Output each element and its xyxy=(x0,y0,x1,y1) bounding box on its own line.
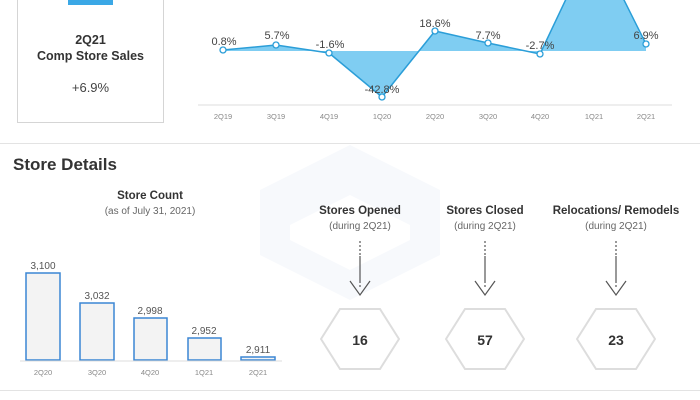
arrow xyxy=(474,241,496,296)
bar chart: store count: 2,998 xyxy=(137,306,163,317)
store count title xyxy=(105,190,195,217)
label: Stores Closed xyxy=(446,205,524,217)
line chart: comp sales: 2Q19 xyxy=(214,112,232,121)
bar chart: store count: 2Q20 xyxy=(34,368,52,377)
hexagon value: 16 xyxy=(352,332,368,348)
label xyxy=(446,205,524,232)
arrow xyxy=(606,241,626,296)
label: (during 2Q21) xyxy=(454,221,516,232)
label xyxy=(319,205,401,232)
store count title: Store Count xyxy=(117,190,183,202)
heading: Store Details: Store Details xyxy=(13,155,117,174)
label: (during 2Q21) xyxy=(329,221,391,232)
bar chart: store count: 2,952 xyxy=(191,326,217,337)
panel: stores opened xyxy=(319,205,401,370)
line chart: comp sales: 3Q20 xyxy=(479,112,497,121)
line chart: comp sales: -42.8% xyxy=(365,84,400,96)
bar chart: store count: 4Q20 xyxy=(141,368,159,377)
line chart: comp sales: 0.8% xyxy=(211,36,237,48)
store count title: (as of July 31, 2021) xyxy=(105,206,195,217)
icon: blue bar xyxy=(68,0,113,5)
hexagon value xyxy=(320,308,400,370)
hexagon value: 57 xyxy=(477,332,493,348)
line chart: comp sales: 1Q21 xyxy=(585,112,603,121)
box value: +6.9% xyxy=(72,80,109,95)
line chart: comp sales: 1Q20 xyxy=(373,112,391,121)
box title: Comp Store Sales xyxy=(37,49,144,63)
line chart: comp sales: 18.6% xyxy=(419,18,451,30)
hexagon value xyxy=(445,308,525,370)
line chart: comp sales: 7.7% xyxy=(475,30,501,42)
label xyxy=(553,205,679,232)
line chart: comp sales xyxy=(198,0,672,121)
panel: relocations xyxy=(553,205,679,370)
line chart: comp sales: 4Q20 xyxy=(531,112,549,121)
box title: 2Q21 xyxy=(75,33,106,47)
panel: comp store sales box xyxy=(17,0,164,123)
line chart: comp sales: 2Q20 xyxy=(426,112,444,121)
bar chart: store count: 3,032 xyxy=(84,291,110,302)
line chart: comp sales: 3Q19 xyxy=(267,112,285,121)
hexagon value: 23 xyxy=(608,332,624,348)
bar chart: store count: 1Q21 xyxy=(195,368,213,377)
label: Relocations/ Remodels xyxy=(553,205,679,217)
line chart: comp sales: 2Q21 xyxy=(637,112,655,121)
bar chart: store count: 2,911 xyxy=(246,345,271,356)
bar chart: store count: 3,100 xyxy=(30,261,56,272)
bar chart: store count: 3Q20 xyxy=(88,368,106,377)
line chart: comp sales: 5.7% xyxy=(264,30,290,42)
label: (during 2Q21) xyxy=(585,221,647,232)
panel: stores closed xyxy=(445,205,525,370)
hexagon value xyxy=(576,308,656,370)
line chart: comp sales: 4Q19 xyxy=(320,112,338,121)
bar chart: store count: 2Q21 xyxy=(249,368,267,377)
line chart: comp sales: -1.6% xyxy=(316,39,345,51)
arrow xyxy=(350,241,370,296)
box title xyxy=(37,33,144,63)
label: Stores Opened xyxy=(319,205,401,217)
bar chart: store count xyxy=(20,261,282,377)
line chart: comp sales: 6.9% xyxy=(633,30,659,42)
line chart: comp sales: -2.7% xyxy=(526,40,555,52)
